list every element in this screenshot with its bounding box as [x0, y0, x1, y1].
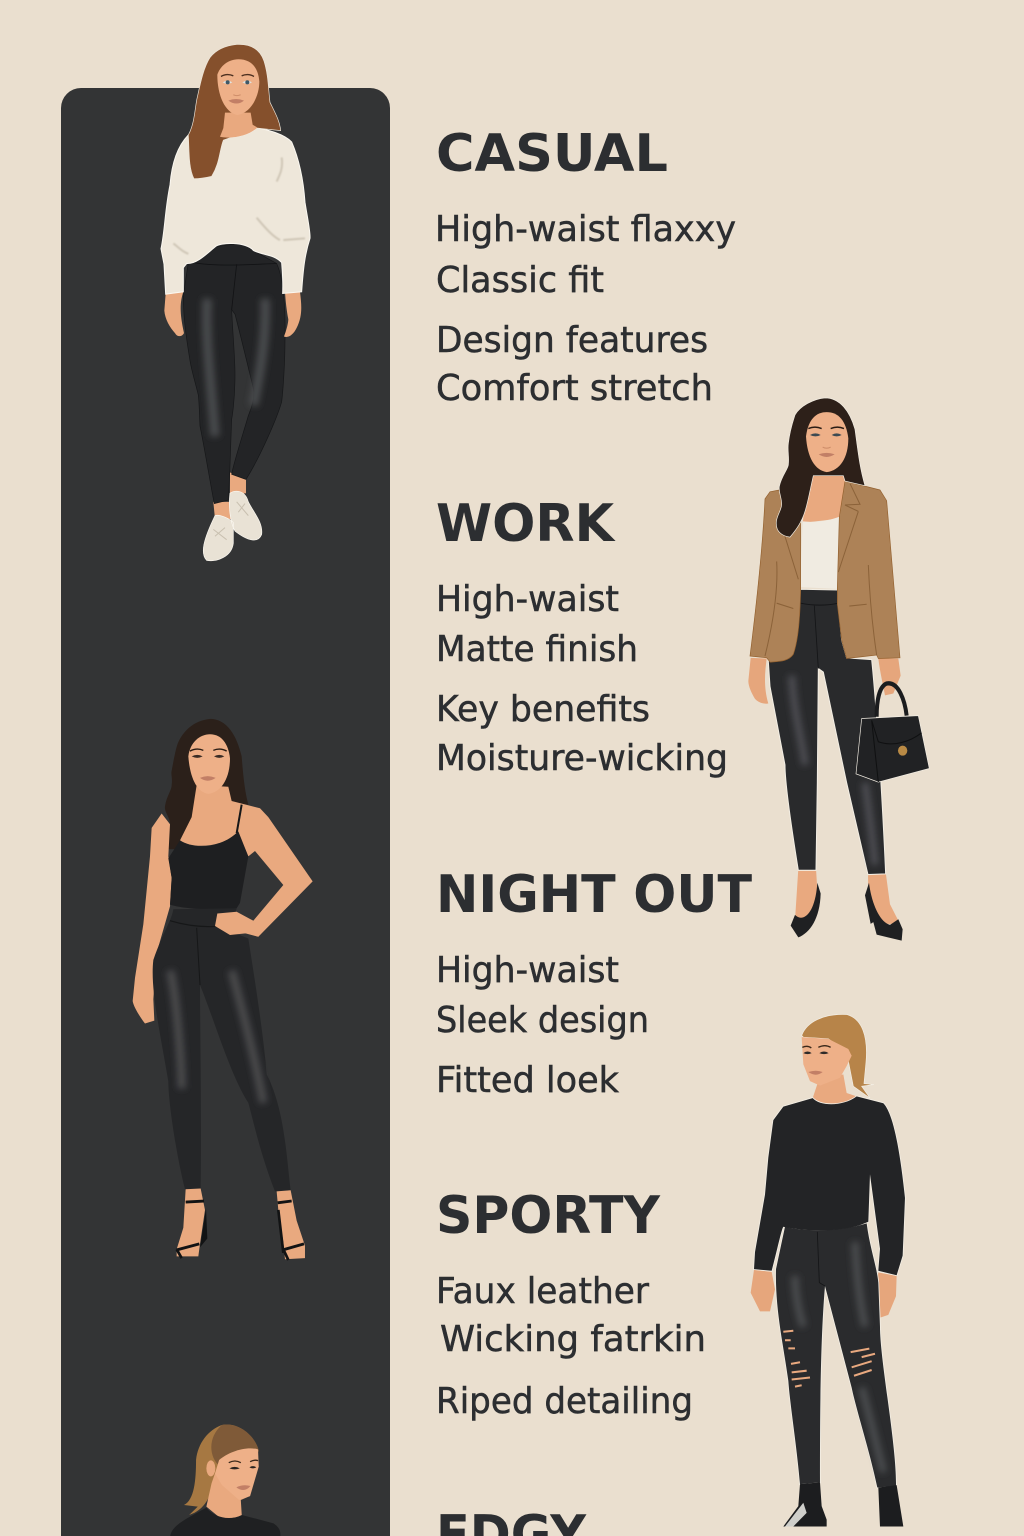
brows	[221, 75, 254, 76]
leggings highlights	[792, 676, 875, 865]
figure: edgy	[170, 1425, 280, 1536]
brows	[808, 427, 844, 429]
lapels and pockets	[765, 484, 877, 656]
face	[806, 412, 848, 472]
blazer	[750, 481, 900, 662]
text: sporty line 1: Faux leather	[436, 1271, 649, 1312]
right sandal foot	[277, 1190, 305, 1259]
neck	[220, 113, 257, 138]
tank top	[800, 517, 839, 589]
text: sporty line 2: Wicking fatrkin	[440, 1319, 706, 1360]
hair	[163, 719, 248, 849]
brows	[190, 749, 227, 751]
lips	[808, 1071, 823, 1075]
sweater	[754, 1096, 905, 1275]
eyes	[810, 433, 842, 436]
sandal heel	[200, 1208, 207, 1247]
heading: night out: NIGHT OUT	[436, 865, 753, 925]
leggings waistband and seam	[801, 603, 838, 669]
text: work line 4: Moisture-wicking	[436, 738, 728, 779]
hair top shade	[211, 1425, 259, 1467]
face	[215, 1448, 259, 1500]
hair	[184, 1425, 258, 1515]
sneakers	[203, 491, 262, 561]
section: sporty	[436, 1186, 706, 1422]
left sandal foot	[177, 1189, 205, 1256]
right arm and chest	[180, 785, 313, 937]
hair	[776, 398, 865, 537]
face	[217, 59, 259, 115]
text: sporty line 3: Riped detailing	[436, 1381, 693, 1422]
eyes	[229, 1466, 256, 1469]
hands	[164, 292, 301, 337]
heading: work: WORK	[436, 494, 616, 554]
eyes	[192, 755, 224, 758]
figure: night out	[133, 719, 313, 1260]
section: work	[436, 494, 728, 779]
hair	[188, 44, 281, 179]
boots	[783, 1482, 903, 1526]
lips	[236, 1485, 250, 1490]
bag flap	[872, 720, 922, 782]
text: night out line 2: Sleek design	[436, 1000, 649, 1041]
bag handle	[877, 683, 907, 717]
section: casual	[435, 124, 736, 409]
silver toe	[785, 1503, 807, 1526]
lips	[819, 453, 835, 457]
ear	[206, 1460, 215, 1476]
text: work line 2: Matte finish	[436, 629, 638, 670]
sandal straps	[177, 1201, 304, 1260]
strap	[237, 805, 242, 833]
nose	[233, 93, 241, 97]
sweater folds	[173, 157, 305, 254]
text: night out line 1: High-waist	[436, 950, 619, 991]
bag clasp	[898, 746, 907, 756]
text: work line 1: High-waist	[436, 579, 619, 620]
leggings	[768, 589, 886, 875]
leggings	[183, 242, 285, 504]
eyes	[223, 81, 252, 84]
bag body	[856, 716, 929, 782]
leggings rips	[783, 1331, 875, 1387]
figure: casual	[161, 44, 310, 561]
section: night out	[436, 865, 753, 1101]
text: casual line 1: High-waist flaxxy	[435, 209, 736, 250]
nose	[823, 447, 831, 448]
lips	[200, 776, 216, 781]
leggings	[776, 1223, 896, 1488]
hands	[751, 1270, 897, 1318]
leggings highlights	[207, 299, 265, 436]
brows	[229, 1460, 258, 1463]
leggings highlights	[795, 1242, 883, 1472]
tank top	[168, 831, 248, 909]
text: night out line 3: Fitted loek	[436, 1060, 619, 1101]
text: casual line 4: Comfort stretch	[436, 368, 713, 409]
ankles	[213, 473, 246, 519]
neck	[813, 1074, 857, 1106]
figure: work	[748, 398, 929, 941]
face	[802, 1037, 852, 1086]
text: casual line 2: Classic fit	[436, 260, 604, 301]
hair	[802, 1014, 874, 1098]
leggings and sweater cream outline	[754, 1096, 905, 1488]
handbag	[856, 683, 929, 782]
sweater	[161, 127, 310, 294]
lips	[228, 99, 244, 104]
text: work line 3: Key benefits	[436, 689, 650, 730]
sweater	[170, 1508, 280, 1536]
left arm	[133, 814, 172, 1024]
sneaker laces	[213, 502, 248, 540]
heading: casual: CASUAL	[436, 124, 668, 184]
face	[188, 734, 230, 794]
heading: sporty: SPORTY	[436, 1186, 661, 1246]
irises	[226, 80, 249, 84]
panel: dark column	[61, 88, 390, 1536]
hands	[748, 658, 901, 704]
neck	[206, 1473, 250, 1519]
leggings	[153, 908, 291, 1191]
leggings highlights	[170, 971, 263, 1103]
pumps	[791, 883, 903, 941]
text: casual line 3: Design features	[436, 320, 708, 361]
leggings seam	[817, 1232, 825, 1286]
waistband and seam	[170, 921, 237, 985]
calves	[795, 869, 900, 924]
hand on hip	[215, 912, 258, 937]
figure: sporty	[751, 1014, 905, 1526]
neck and chest	[803, 469, 845, 523]
brows	[802, 1046, 831, 1048]
eyes	[803, 1052, 829, 1054]
leggings waistband	[188, 261, 277, 310]
